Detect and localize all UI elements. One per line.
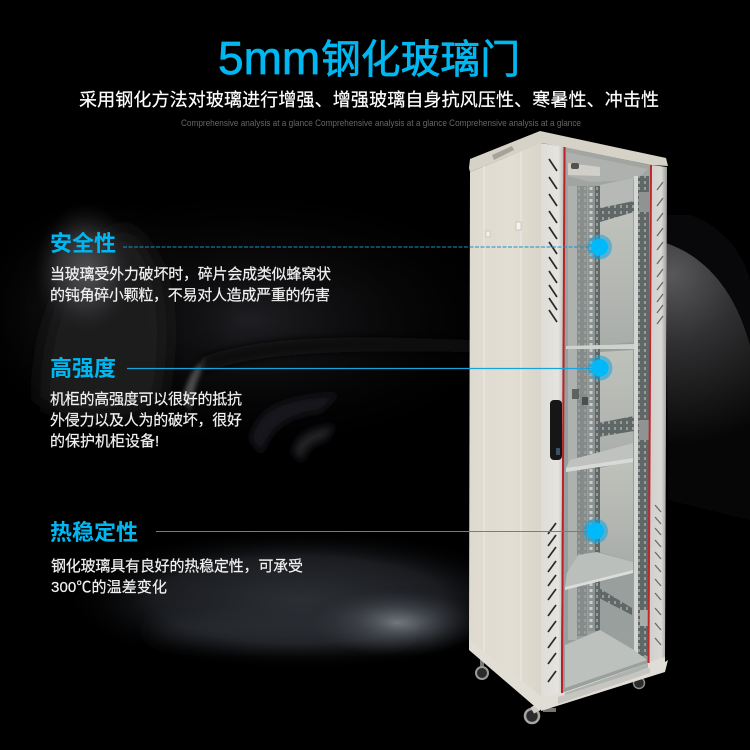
- text: 安全性 description: 当玻璃受外力破坏时，碎片会成类似蜂窝状: [50, 265, 331, 283]
- text: 高强度 description: 的保护机柜设备!: [50, 433, 159, 450]
- lock hardware: [572, 389, 579, 399]
- feature: 安全性: [50, 231, 612, 304]
- title: 钢化玻璃门: [321, 38, 520, 82]
- title: 5mm: [218, 32, 320, 84]
- text: 安全性 description: [50, 265, 331, 304]
- text: 安全性 description: 的钝角碎小颗粒，不易对人造成严重的伤害: [50, 287, 330, 304]
- cross rails: [600, 201, 634, 222]
- back panel: [600, 212, 633, 345]
- leader line: 热稳定性: [156, 530, 588, 532]
- roof: [469, 131, 668, 172]
- feature: 高强度: [50, 356, 612, 450]
- text: 热稳定性 description: 300℃的温差变化: [51, 579, 167, 596]
- vent strip: [558, 668, 650, 704]
- text: 热稳定性 description: [51, 558, 303, 596]
- vent slots: [548, 159, 557, 682]
- heading: 高强度: 高强度: [50, 356, 116, 381]
- text: 高强度 description: 外侵力以及人为的破坏，很好: [50, 412, 242, 429]
- casters: [476, 650, 644, 723]
- marker: 高强度: [588, 356, 612, 380]
- shelves: [566, 344, 634, 349]
- leader line: 安全性: [123, 246, 590, 248]
- heading: 热稳定性: 热稳定性: [50, 520, 138, 545]
- glass door interior: [562, 147, 651, 698]
- feature: 热稳定性: [50, 518, 608, 596]
- marker: 热稳定性: [583, 518, 608, 544]
- english tagline: Comprehensive analysis at a glance Comprehensive analysis at a glance Comprehensive analysis at a glance: [181, 118, 581, 129]
- subtitle: 采用钢化方法对玻璃进行增强、增强玻璃自身抗风压性、寒暑性、冲击性: [79, 90, 659, 110]
- title: [218, 32, 520, 84]
- marker: 安全性: [587, 234, 612, 260]
- leader line: 高强度: [127, 368, 592, 370]
- text: 高强度 description: [50, 391, 242, 450]
- left door strip: [541, 143, 564, 700]
- text: 高强度 description: 机柜的高强度可以很好的抵抗: [50, 391, 242, 408]
- handle: [550, 400, 562, 460]
- heading: 安全性: 安全性: [50, 231, 116, 256]
- right door strip: [648, 165, 667, 663]
- red seals: [562, 147, 564, 693]
- side panel: [469, 143, 541, 702]
- text: 热稳定性 description: 钢化玻璃具有良好的热稳定性，可承受: [51, 558, 303, 575]
- base: [540, 657, 668, 711]
- posts: [588, 186, 595, 631]
- cabinet: [469, 131, 668, 723]
